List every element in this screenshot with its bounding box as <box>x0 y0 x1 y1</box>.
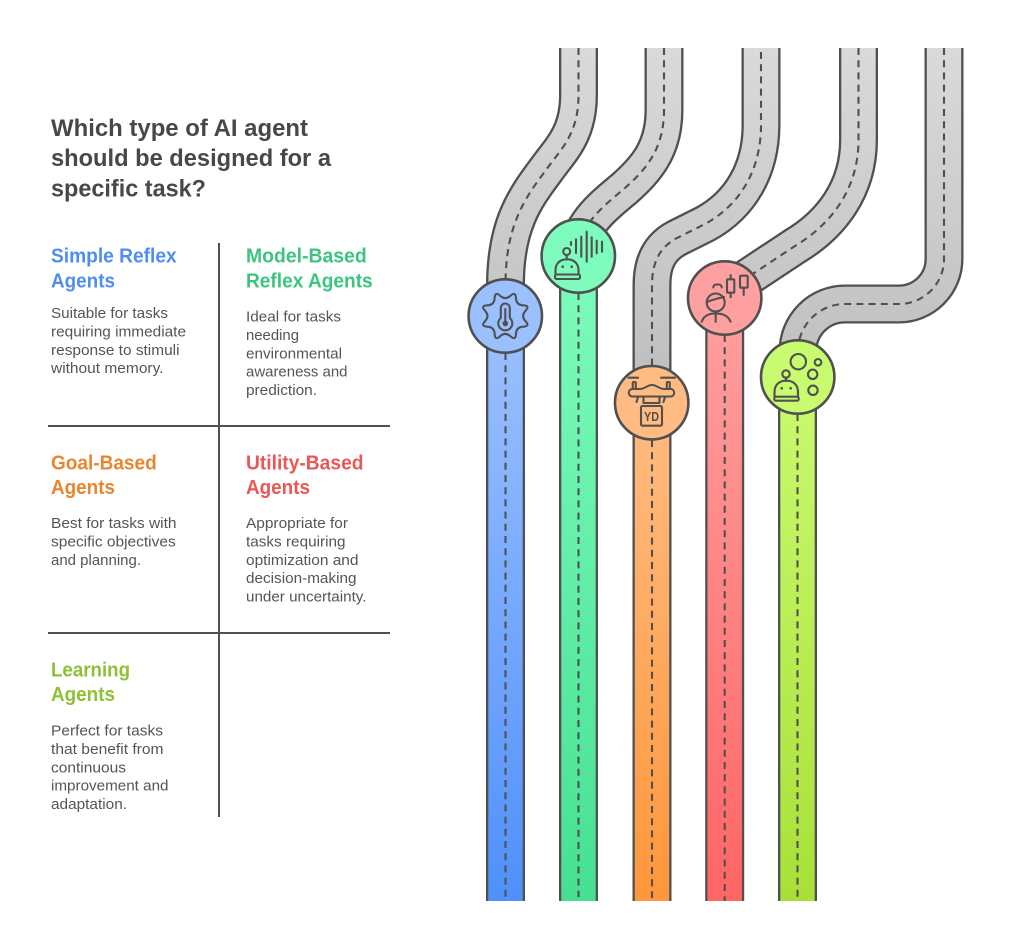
panel: simple reflex agents: requiring immediate <box>51 324 186 340</box>
panel: utility-based agents: under uncertainty. <box>246 590 366 606</box>
icon: delivery drone: YD <box>644 409 659 424</box>
panel: goal-based agents: specific objectives <box>51 535 176 551</box>
panel: simple reflex agents: without memory. <box>50 361 164 377</box>
road 1: blue <box>506 48 578 901</box>
panel: goal-based agents <box>51 452 176 569</box>
panel: model-based reflex agents: Model-Based <box>246 246 367 268</box>
icon: person with candlesticks <box>688 261 761 335</box>
panel: model-based reflex agents: awareness and <box>246 364 348 380</box>
title: specific task? <box>51 176 206 202</box>
title: should be designed for a <box>51 145 331 172</box>
panel: model-based reflex agents: Ideal for tasks <box>246 310 341 326</box>
panel: simple reflex agents: Simple Reflex <box>51 246 177 268</box>
icon: robot with sound waves <box>542 219 615 293</box>
panel: model-based reflex agents: environmental <box>246 346 342 362</box>
road 5: lime <box>798 48 944 901</box>
panel: learning agents: continuous <box>51 760 126 776</box>
panel: utility-based agents <box>246 452 366 606</box>
road 2: green <box>578 48 664 901</box>
panel: model-based reflex agents <box>246 246 373 399</box>
panel: learning agents: Learning <box>51 660 130 682</box>
panel: model-based reflex agents: Reflex Agents <box>246 270 373 292</box>
panel: learning agents: Agents <box>51 684 115 706</box>
panel: learning agents <box>51 660 168 813</box>
panel: model-based reflex agents: prediction. <box>246 383 317 399</box>
panel: learning agents: Perfect for tasks <box>51 724 163 740</box>
panel: utility-based agents: Appropriate for <box>246 516 348 532</box>
panel: goal-based agents: Goal-Based <box>51 452 157 474</box>
road 4: red <box>724 48 858 901</box>
panel: simple reflex agents: Agents <box>51 270 115 292</box>
panel: utility-based agents: tasks requiring <box>246 535 346 551</box>
panel: simple reflex agents <box>50 246 186 377</box>
icon: delivery drone <box>615 366 688 439</box>
panel: goal-based agents: Best for tasks with <box>51 516 176 532</box>
panel: utility-based agents: optimization and <box>246 553 358 569</box>
title: Which type of AI agent <box>51 115 308 142</box>
panel: utility-based agents: Agents <box>246 477 310 499</box>
panel: learning agents: adaptation. <box>51 797 127 813</box>
panel: utility-based agents: Utility-Based <box>246 452 364 474</box>
panel: utility-based agents: decision-making <box>246 571 356 587</box>
title <box>51 115 331 202</box>
panel: goal-based agents: Agents <box>51 477 115 499</box>
panel: model-based reflex agents: needing <box>246 328 299 344</box>
panel: learning agents: improvement and <box>51 778 168 794</box>
panel: simple reflex agents: response to stimuli <box>51 343 180 359</box>
panel: goal-based agents: and planning. <box>51 553 141 569</box>
panel: learning agents: that benefit from <box>51 742 164 758</box>
icon: gear with thermometer <box>469 279 542 353</box>
road 3: orange <box>652 48 761 901</box>
panel: simple reflex agents: Suitable for tasks <box>51 306 168 322</box>
icon: robot with bubbles <box>761 340 834 414</box>
